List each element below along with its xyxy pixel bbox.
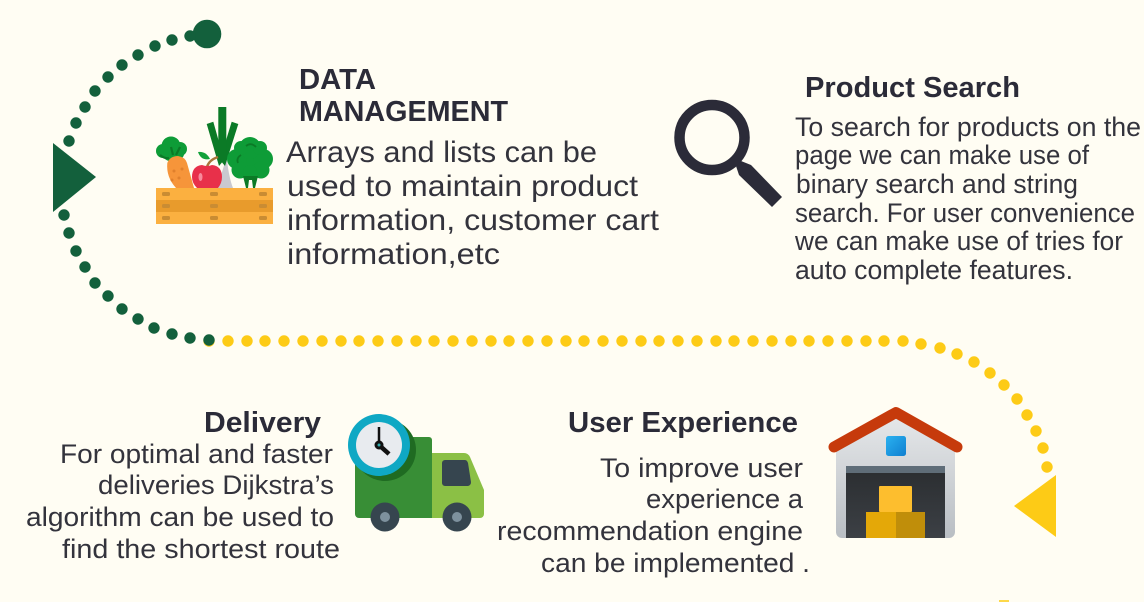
bottom edge yellow fragment [999,600,1009,602]
text: user experience body: experience a [646,484,804,514]
text: user experience body: recommendation engine [497,516,803,546]
arrow: yellow triangle [1014,475,1056,537]
text: product search body: we can make use of tries for [794,226,1123,256]
text: user experience body: can be implemented . [541,548,810,578]
text: product search body: page we can make use of [795,140,1089,170]
text: delivery body: algorithm can be used to [26,502,334,532]
text: data management body [286,136,659,271]
icon: warehouse [834,412,957,538]
text: product search body: binary search and string [796,169,1078,199]
text: user experience body [497,453,810,578]
text: data management body: information,etc [287,238,500,271]
text: data management body: Arrays and lists can be [286,136,597,169]
text: product search body: search. For user convenience [795,198,1135,228]
icon: magnifying glass [680,105,782,207]
text: data management body: information, customer cart [287,204,659,237]
heading: data management: MANAGEMENT [299,96,508,128]
text: delivery body: deliveries Dijkstra’s [98,470,334,500]
text: product search body [794,112,1141,285]
icon: vegetable crate [156,107,273,224]
text: product search body: auto complete features. [795,255,1073,285]
heading: data management [299,64,508,128]
text: delivery body: find the shortest route [62,534,340,564]
green dotted path [58,20,221,346]
text: data management body: used to maintain product [287,170,638,203]
heading: user experience: User Experience [568,407,798,439]
heading: data management: DATA [299,64,376,96]
text: user experience body: To improve user [600,453,803,483]
heading: product search: Product Search [805,72,1020,104]
icon: delivery truck with clock [348,414,484,532]
text: product search body: To search for products on the [795,112,1141,142]
heading: delivery: Delivery [204,407,321,439]
text: delivery body: For optimal and faster [60,439,333,469]
arrow: green triangle [53,143,96,212]
text: delivery body [26,439,340,564]
yellow dotted path [203,335,1053,473]
